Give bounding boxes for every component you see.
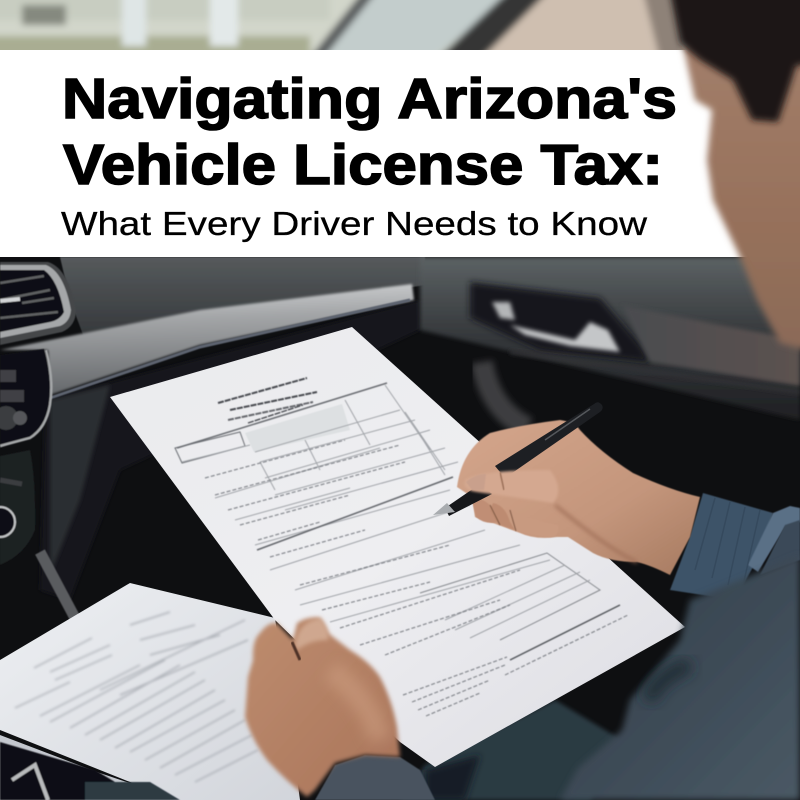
main form paper (110, 327, 685, 767)
thumb (464, 470, 558, 503)
title line 2: Vehicle License Tax: (63, 133, 663, 197)
car part lower left (0, 742, 180, 800)
dashboard silver trim (0, 284, 414, 395)
form small text (205, 440, 628, 716)
dark shirt sleeve (560, 555, 800, 800)
wrist shadow and palm crease (555, 505, 637, 562)
back of hand (457, 420, 700, 575)
form table (175, 383, 620, 660)
door pull bar (482, 362, 528, 428)
door armrest panel (622, 305, 800, 386)
pen (433, 402, 603, 516)
dark hollow behind hand (760, 520, 800, 575)
dashboard lower dark area (40, 300, 420, 600)
writing hand with pen (433, 402, 800, 600)
door lower dark line (510, 352, 800, 392)
door handle chrome (492, 302, 620, 352)
dashboard upper panel (60, 257, 425, 340)
door panel upper (420, 257, 800, 420)
lap jeans (400, 700, 630, 800)
holding hand (245, 618, 435, 800)
holding sleeve (315, 755, 435, 800)
air vent (0, 262, 76, 345)
form heading (218, 378, 317, 423)
center console (0, 349, 75, 618)
second paper text rows (15, 612, 258, 782)
door handle recess (470, 282, 650, 362)
subtitle: What Every Driver Needs to Know (61, 205, 647, 242)
blurred window view (0, 0, 800, 60)
car interior background (0, 257, 800, 800)
title banner (0, 50, 770, 257)
person's head, blurred foreground (668, 0, 800, 356)
title line 1: Navigating Arizona's (62, 67, 677, 131)
lower fingers (472, 498, 558, 537)
knit sleeve (670, 493, 773, 600)
second paper, lower left (0, 583, 300, 800)
